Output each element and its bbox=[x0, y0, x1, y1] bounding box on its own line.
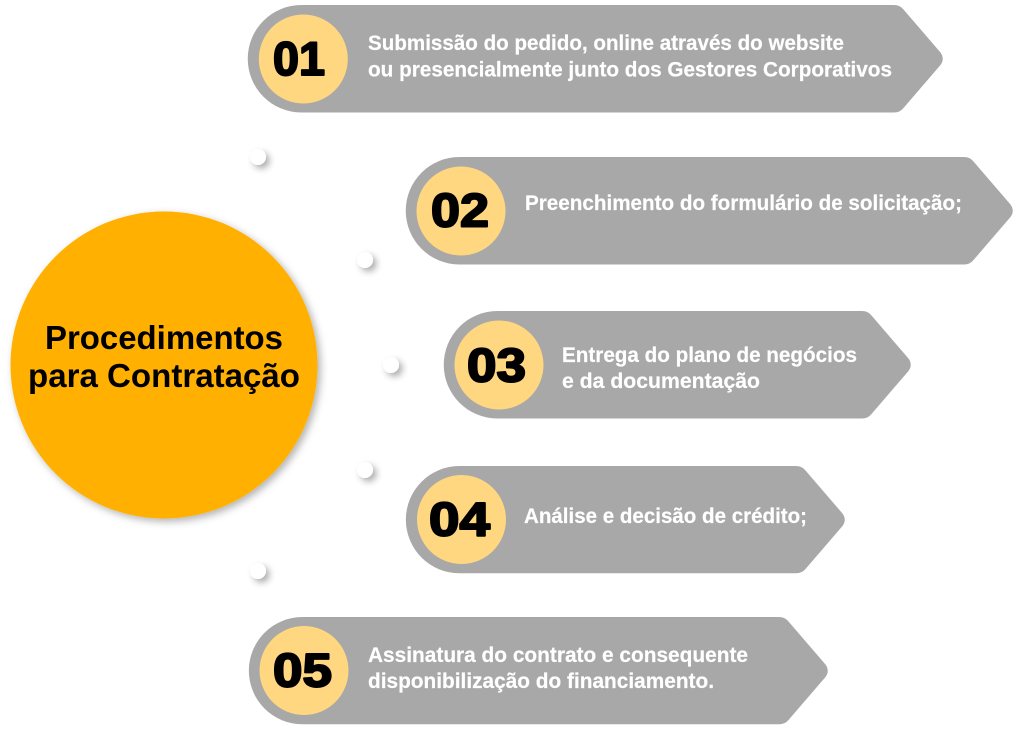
step 05 text: Assinatura do contrato e consequente bbox=[368, 643, 748, 667]
heading: para Contratação bbox=[28, 357, 300, 394]
step 05: 05 bbox=[273, 644, 332, 696]
step 05 bbox=[249, 617, 828, 724]
step 03 text: Entrega do plano de negócios bbox=[562, 343, 857, 367]
step 04 bbox=[406, 466, 845, 573]
step 02 text: Preenchimento do formulário de solicitação; bbox=[525, 191, 962, 215]
central circle: Procedimentos para Contratação bbox=[10, 212, 318, 518]
step 01 bbox=[248, 5, 943, 112]
step 02 bbox=[406, 157, 1013, 264]
step 01 text: Submissão do pedido, online através do website bbox=[368, 31, 844, 55]
step 04: 04 bbox=[429, 492, 490, 546]
step 01: 01 bbox=[273, 32, 325, 85]
heading: Procedimentos bbox=[45, 319, 283, 356]
step 03 bbox=[444, 311, 911, 418]
step 02: 02 bbox=[431, 184, 489, 236]
step 03: 03 bbox=[467, 338, 526, 392]
connector dots bbox=[250, 149, 399, 579]
step 01 text: ou presencialmente junto dos Gestores Corporativos bbox=[368, 58, 892, 82]
step 03 text: e da documentação bbox=[562, 369, 760, 393]
step 05 text: disponibilização do financiamento. bbox=[368, 669, 714, 693]
step 04 text: Análise e decisão de crédito; bbox=[524, 504, 807, 528]
